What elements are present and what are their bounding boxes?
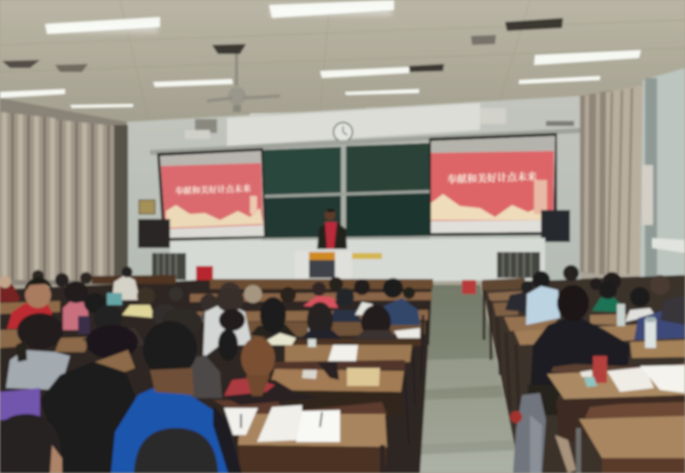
podium xyxy=(295,251,382,280)
right curtains xyxy=(580,85,645,275)
rail above blackboard xyxy=(150,128,580,155)
left projection screen xyxy=(157,148,266,241)
ponytail student xyxy=(222,337,320,405)
radiators xyxy=(152,252,540,280)
black hoodie student xyxy=(40,325,138,473)
back-row students, right block xyxy=(505,265,685,340)
desk legs left block xyxy=(420,302,432,346)
red cup xyxy=(593,356,607,383)
cyan container xyxy=(107,293,122,305)
right projection screen xyxy=(429,133,557,236)
blackboard xyxy=(262,143,430,242)
dark-haired student behind xyxy=(82,294,196,356)
upper wall panel xyxy=(227,103,480,146)
front row heads xyxy=(0,414,218,473)
backpack on chair xyxy=(510,393,576,473)
red hoodie student xyxy=(7,277,52,329)
lecturer xyxy=(317,209,347,249)
front right chair and desk xyxy=(576,402,685,473)
right seating block xyxy=(482,275,685,473)
papers on mid desks xyxy=(302,324,420,386)
trash bin xyxy=(462,280,476,294)
book and items on right desk xyxy=(580,365,685,393)
left seating block xyxy=(0,280,432,473)
projectors xyxy=(185,108,574,139)
right side wall xyxy=(640,68,685,290)
floor reflections xyxy=(420,358,515,473)
student at far left xyxy=(0,276,20,302)
grey hoodie girl xyxy=(0,313,70,420)
lower white wall xyxy=(170,238,545,283)
ceiling lights xyxy=(0,0,641,120)
back wall xyxy=(127,96,580,285)
right second desk xyxy=(547,362,685,445)
front center desk xyxy=(213,400,387,473)
ceiling xyxy=(0,0,685,130)
open book on front desk xyxy=(224,405,340,442)
ceiling glow xyxy=(50,6,392,33)
fire box xyxy=(196,266,213,286)
bottles xyxy=(645,317,656,348)
mid desks with chair backs xyxy=(270,338,422,394)
left wall and curtains xyxy=(0,98,128,285)
ceiling fan xyxy=(207,54,280,112)
pink jacket student xyxy=(63,281,90,334)
black coat student xyxy=(528,285,630,415)
right projection screen: 奉献和美好计点未来 xyxy=(447,170,537,186)
mid-row students, left block xyxy=(196,288,396,361)
blue hoodie student xyxy=(111,321,242,473)
left desk rows xyxy=(0,275,433,352)
right desk rows xyxy=(482,278,685,430)
aisle floor xyxy=(420,284,514,462)
ceiling vents and fixtures xyxy=(2,18,563,72)
grey shirt student xyxy=(150,308,222,398)
wall clock xyxy=(334,122,352,142)
dark wall panels and notice boards xyxy=(138,200,570,248)
left projection screen: 奉献和美好计点未来 xyxy=(175,183,252,196)
back-row students, left block xyxy=(32,266,420,325)
